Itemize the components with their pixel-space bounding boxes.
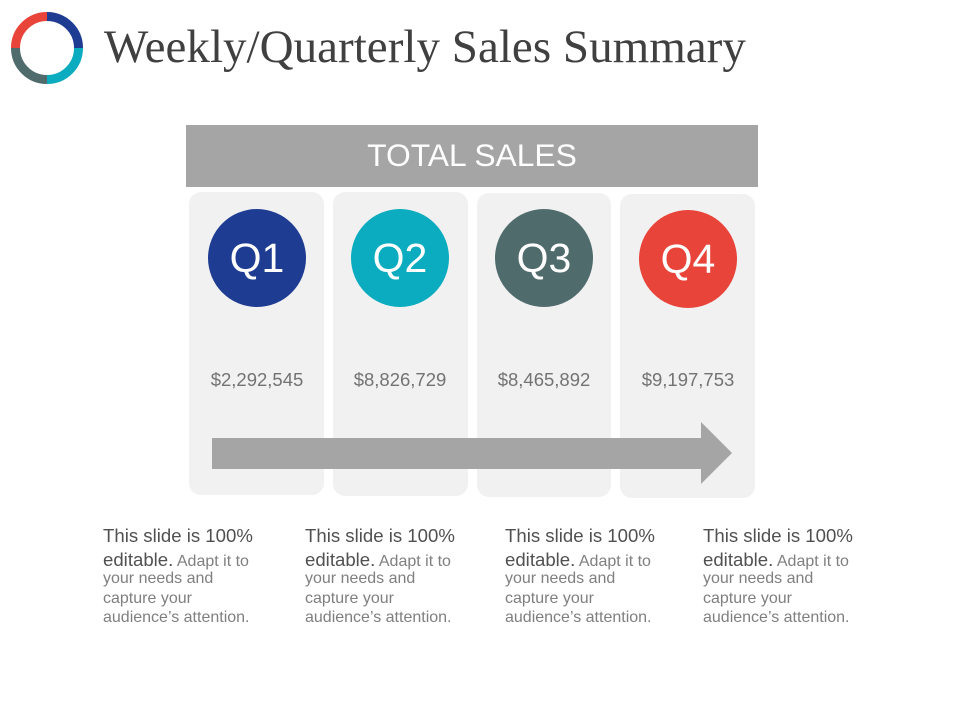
- badge: Q2: [351, 209, 449, 307]
- text block: Q3 note: your needs and: [505, 570, 615, 587]
- panel: Q4 card: [620, 194, 755, 498]
- text block: Q2 note: your needs and: [305, 570, 415, 587]
- text block: Q2 note: audience’s attention.: [305, 609, 451, 626]
- text block: Q1 note: This slide is 100%: [103, 525, 253, 546]
- badge: Q1: [208, 209, 306, 307]
- text block: Q3 note: [505, 525, 655, 626]
- badge: Q3: Q3: [517, 235, 571, 281]
- value: Q2 sales: $8,826,729: [354, 369, 446, 390]
- text block: Q4 note: editable. Adapt it to: [703, 549, 849, 570]
- text block: Q2 note: [305, 525, 455, 626]
- value: Q1 sales: $2,292,545: [211, 369, 303, 390]
- badge: Q3: [495, 209, 593, 307]
- panel: Q3 card: [477, 193, 611, 497]
- header bar: total sales: [186, 125, 758, 187]
- text block: Q4 note: your needs and: [703, 570, 813, 587]
- text block: Q3 note: capture your: [505, 590, 594, 606]
- text block: Q2 note: capture your: [305, 590, 394, 606]
- panel: Q2 card: [333, 192, 468, 496]
- badge: Q2: Q2: [373, 235, 427, 281]
- text block: Q4 note: audience’s attention.: [703, 609, 849, 626]
- text block: Q4 note: [703, 525, 853, 626]
- text block: Q4 note: This slide is 100%: [703, 525, 853, 546]
- badge: Q4: Q4: [661, 236, 715, 282]
- text block: Q1 note: capture your: [103, 590, 192, 606]
- badge: Q1: Q1: [230, 235, 284, 281]
- title: Weekly/Quarterly Sales Summary: [104, 21, 746, 73]
- text block: Q1 note: audience’s attention.: [103, 609, 249, 626]
- arrow: progress across quarters: [212, 422, 732, 484]
- text block: Q1 note: [103, 525, 253, 626]
- text block: Q1 note: your needs and: [103, 570, 213, 587]
- text block: Q1 note: editable. Adapt it to: [103, 549, 249, 570]
- badge: Q4: [639, 210, 737, 308]
- text block: Q4 note: capture your: [703, 590, 792, 606]
- header bar: total sales: TOTAL SALES: [367, 137, 577, 173]
- panel: Q1 card: [189, 192, 324, 495]
- text block: Q3 note: editable. Adapt it to: [505, 549, 651, 570]
- value: Q3 sales: $8,465,892: [498, 369, 590, 390]
- value: Q4 sales: $9,197,753: [642, 369, 734, 390]
- text block: Q3 note: This slide is 100%: [505, 525, 655, 546]
- text block: Q2 note: editable. Adapt it to: [305, 549, 451, 570]
- text block: Q3 note: audience’s attention.: [505, 609, 651, 626]
- icon: segmented donut ring: [11, 12, 83, 84]
- text block: Q2 note: This slide is 100%: [305, 525, 455, 546]
